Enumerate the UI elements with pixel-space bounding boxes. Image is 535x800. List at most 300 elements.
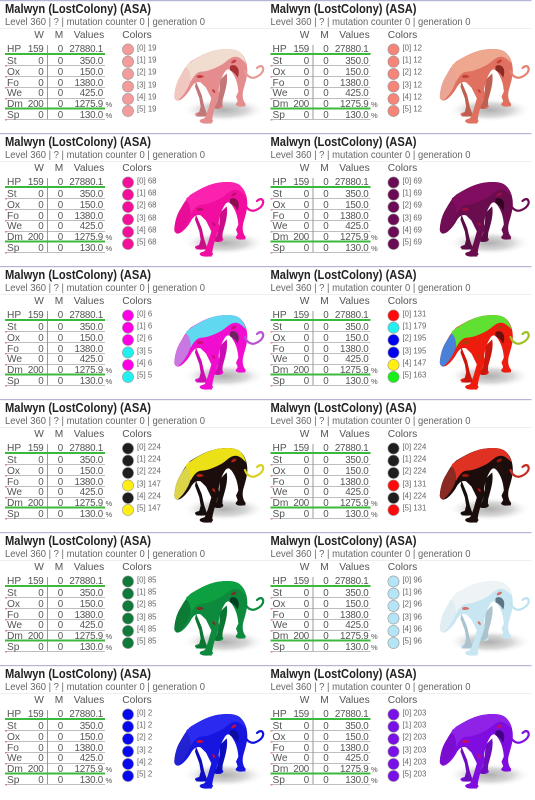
dog tail xyxy=(245,598,263,610)
stats table: 130.0 xyxy=(80,642,104,653)
panel: malwyn colour 85 xyxy=(0,532,266,656)
stats table: 200 xyxy=(28,764,44,775)
stats table: We xyxy=(7,354,22,365)
stats table: 150.0 xyxy=(345,67,369,78)
stats table: Sp xyxy=(7,243,20,254)
level line: Level 360 | ? | mutation counter 0 | generation 0 xyxy=(270,549,471,560)
stats table: 350.0 xyxy=(80,455,104,466)
stats table: 0 xyxy=(38,211,44,222)
colors list: Colors xyxy=(122,429,152,440)
stats table: 350.0 xyxy=(80,56,104,67)
stats table xyxy=(272,30,378,121)
colors list xyxy=(122,30,157,117)
panel: malwyn black and yellow xyxy=(0,399,266,523)
stats table: 0 xyxy=(38,642,44,653)
stats table xyxy=(272,562,378,653)
stats table: 27880.1 xyxy=(69,44,103,55)
stats table: 0 xyxy=(304,211,310,222)
stats table: % xyxy=(371,100,378,109)
colors list: [3] 12 xyxy=(402,80,422,90)
stats table: HP xyxy=(272,177,287,188)
stats table: We xyxy=(7,620,22,631)
stats table: W xyxy=(300,562,310,573)
stats table: 1275.9 xyxy=(75,365,103,376)
colors list: Colors xyxy=(388,30,417,41)
stats table: 350.0 xyxy=(345,189,369,200)
stats table: 0 xyxy=(304,743,310,754)
stats table: Values xyxy=(74,296,104,307)
stats table: Dm xyxy=(7,99,23,110)
level line: Level 360 | ? | mutation counter 0 | generation 0 xyxy=(5,416,205,427)
title: Malwyn (LostColony) (ASA) xyxy=(5,401,151,415)
stats table: 0 xyxy=(323,243,329,254)
colors list: [4] 224 xyxy=(137,492,162,500)
stats table: HP xyxy=(7,443,21,454)
stats table: Values xyxy=(339,163,370,174)
stats table: 0 xyxy=(323,232,329,243)
stats table: 27880.1 xyxy=(69,177,103,188)
stats table: 0 xyxy=(323,365,329,376)
stats table: 0 xyxy=(58,709,64,720)
stats table: 350.0 xyxy=(80,721,104,732)
stats table: 200 xyxy=(28,631,44,642)
stats table: 0 xyxy=(304,221,310,232)
stats table: 0 xyxy=(58,620,64,631)
stats table: St xyxy=(272,56,282,67)
stats table: 0 xyxy=(58,322,64,333)
stats table: M xyxy=(320,562,329,573)
stats table: 150.0 xyxy=(345,333,369,344)
stats table: 425.0 xyxy=(80,88,104,99)
stats table: Ox xyxy=(272,333,286,344)
title: Malwyn (LostColony) (ASA) xyxy=(270,135,416,149)
stats table: 425.0 xyxy=(345,620,369,631)
colors list xyxy=(122,562,157,649)
stats table: St xyxy=(7,56,17,67)
stats table: 0 xyxy=(304,455,310,466)
stats table: 0 xyxy=(58,200,64,211)
colors list: [3] 19 xyxy=(137,80,157,90)
colors list: [5] 96 xyxy=(402,636,422,646)
stats table: 0 xyxy=(38,200,44,211)
colors list: [0] 131 xyxy=(402,310,426,318)
stats table: 0 xyxy=(304,477,310,488)
colors list: Colors xyxy=(388,562,417,573)
stats table: 130.0 xyxy=(345,110,369,121)
stats table: Dm xyxy=(7,365,23,376)
stats table: Values xyxy=(339,695,370,706)
stats table: Dm xyxy=(272,764,288,775)
stats table: 1380.0 xyxy=(340,211,369,222)
stats table: 0 xyxy=(323,477,329,488)
stats table: 159 xyxy=(28,443,44,454)
stats table: 0 xyxy=(323,189,329,200)
stats table: 0 xyxy=(304,200,310,211)
stats table: Fo xyxy=(272,610,285,621)
stats table: 1380.0 xyxy=(340,610,369,621)
stats table: 1380.0 xyxy=(75,211,104,222)
stats table: We xyxy=(7,487,22,498)
stats table: 150.0 xyxy=(345,732,369,743)
stats table: 350.0 xyxy=(345,322,369,333)
stats table: 0 xyxy=(304,88,310,99)
stats table: 0 xyxy=(58,354,64,365)
stats table: Fo xyxy=(7,743,19,754)
stats table: 0 xyxy=(58,67,64,78)
stats table: 0 xyxy=(304,620,310,631)
stats table: 0 xyxy=(304,599,310,610)
stats table: 0 xyxy=(58,487,64,498)
stats table: We xyxy=(272,753,288,764)
stats table: 200 xyxy=(28,365,44,376)
stats table: 1380.0 xyxy=(75,610,104,621)
stats table: 159 xyxy=(293,44,309,55)
stats table: 200 xyxy=(28,232,44,243)
stats table: 0 xyxy=(304,487,310,498)
stats table: 0 xyxy=(38,221,44,232)
stats table: 0 xyxy=(38,487,44,498)
stats table: 0 xyxy=(38,610,44,621)
stats table: 0 xyxy=(38,78,44,89)
stats table: St xyxy=(7,189,17,200)
stats table: Sp xyxy=(272,509,285,520)
stats table: We xyxy=(272,487,288,498)
colors list: [0] 2 xyxy=(137,708,152,718)
stats table: Sp xyxy=(272,243,285,254)
dog tail xyxy=(245,66,263,78)
stats table: 0 xyxy=(323,99,329,110)
stats table: St xyxy=(7,588,17,599)
stats table: HP xyxy=(7,709,21,720)
stats table: 350.0 xyxy=(345,588,369,599)
stats table: Sp xyxy=(272,775,285,786)
colors list: [3] 85 xyxy=(137,612,157,622)
stats table: We xyxy=(272,354,288,365)
stats table: Dm xyxy=(272,365,288,376)
stats table: 0 xyxy=(323,333,329,344)
stats table: 0 xyxy=(323,322,329,333)
colors list: [5] 203 xyxy=(402,770,426,778)
colors list: Colors xyxy=(122,695,152,706)
stats table: M xyxy=(55,163,63,174)
stats table: Ox xyxy=(7,466,20,477)
stats table: 0 xyxy=(304,189,310,200)
panel: malwyn mixed colours xyxy=(266,266,532,390)
colors list: [1] 85 xyxy=(137,588,157,596)
stats table: % xyxy=(106,111,112,120)
colors list: Colors xyxy=(122,30,152,41)
dog tail xyxy=(245,199,263,211)
stats table: W xyxy=(34,163,44,174)
stats table: 425.0 xyxy=(80,354,104,365)
stats table: 0 xyxy=(323,610,329,621)
title: Malwyn (LostColony) (ASA) xyxy=(270,667,416,681)
stats table: 27880.1 xyxy=(69,576,103,587)
title: Malwyn (LostColony) (ASA) xyxy=(270,534,416,548)
colors list: [5] 147 xyxy=(137,504,161,512)
dog render xyxy=(174,448,266,523)
level line: Level 360 | ? | mutation counter 0 | generation 0 xyxy=(5,17,205,28)
stats table: 0 xyxy=(304,344,310,355)
level line: Level 360 | ? | mutation counter 0 | generation 0 xyxy=(270,17,471,28)
stats table: 1275.9 xyxy=(340,365,368,376)
stats table: Dm xyxy=(272,631,288,642)
stats table: 200 xyxy=(28,99,44,110)
stats table: 27880.1 xyxy=(335,310,368,321)
stats table: 1275.9 xyxy=(340,631,368,642)
stats table: Sp xyxy=(272,642,285,653)
stats table: 0 xyxy=(323,78,329,89)
stats table: % xyxy=(371,366,378,375)
stats table: 0 xyxy=(323,498,329,509)
dog tail xyxy=(245,332,263,344)
stats table: Dm xyxy=(7,631,23,642)
stats table: We xyxy=(272,221,288,232)
colors list: Colors xyxy=(122,296,152,307)
stats table: Dm xyxy=(272,498,288,509)
stats table: 0 xyxy=(58,310,64,321)
stats table: 425.0 xyxy=(345,487,369,498)
stats table: 159 xyxy=(28,310,44,321)
title: Malwyn (LostColony) (ASA) xyxy=(5,534,151,548)
stats table: Sp xyxy=(7,642,20,653)
stats table: 27880.1 xyxy=(69,443,103,454)
stats table: 1380.0 xyxy=(340,344,369,355)
stats table: W xyxy=(34,562,44,573)
colors list: [0] 224 xyxy=(402,442,427,452)
stats table: % xyxy=(106,366,112,375)
stats table: 0 xyxy=(58,610,64,621)
colors list xyxy=(388,163,422,250)
stats table: M xyxy=(320,163,329,174)
colors list: [4] 96 xyxy=(402,624,422,634)
stats table: % xyxy=(106,233,112,242)
colors list: [0] 96 xyxy=(402,576,422,584)
stats table: Fo xyxy=(272,743,285,754)
stats table: Values xyxy=(339,429,370,440)
stats table xyxy=(7,296,112,387)
stats table: 150.0 xyxy=(80,67,104,78)
stats table: Sp xyxy=(272,376,285,387)
stats table: 159 xyxy=(28,576,44,587)
stats table: 150.0 xyxy=(80,599,104,610)
stats table: HP xyxy=(7,44,21,55)
stats table: 350.0 xyxy=(345,56,369,67)
dog render xyxy=(174,581,266,656)
colors list: [5] 68 xyxy=(137,238,157,246)
dog render xyxy=(174,182,266,257)
stats table: % xyxy=(106,377,112,386)
colors list: [1] 179 xyxy=(402,322,426,330)
stats table: Ox xyxy=(7,200,20,211)
stats table: St xyxy=(7,322,17,333)
stats table: M xyxy=(55,562,63,573)
colors list: [3] 96 xyxy=(402,612,422,622)
stats table: 0 xyxy=(323,631,329,642)
colors list xyxy=(122,695,152,782)
stats table: 0 xyxy=(58,732,64,743)
stats table: 0 xyxy=(58,588,64,599)
colors list: [3] 2 xyxy=(137,746,152,754)
colors list: [0] 224 xyxy=(137,442,162,452)
stats table: 0 xyxy=(58,576,64,587)
stats table: 0 xyxy=(58,764,64,775)
stats table: 159 xyxy=(28,44,44,55)
stats table: 0 xyxy=(304,67,310,78)
stats table: M xyxy=(55,30,63,41)
stats table: % xyxy=(371,377,378,386)
stats table: % xyxy=(106,643,112,652)
stats table: % xyxy=(106,244,112,253)
stats table: Sp xyxy=(7,509,20,520)
stats table: 200 xyxy=(293,232,310,243)
stats table: 0 xyxy=(38,354,44,365)
stats table: 0 xyxy=(304,721,310,732)
stats table: Sp xyxy=(7,376,20,387)
colors list: Colors xyxy=(388,429,417,440)
dog tail xyxy=(510,731,529,743)
stats table xyxy=(272,429,378,520)
colors list: [1] 224 xyxy=(137,454,162,464)
stats table: 159 xyxy=(28,709,44,720)
stats table: Ox xyxy=(272,732,286,743)
colors list: [5] 69 xyxy=(402,238,422,246)
colors list: [3] 195 xyxy=(402,346,427,356)
stats table: 0 xyxy=(58,376,64,387)
colors list: Colors xyxy=(388,163,417,174)
stats table: 159 xyxy=(293,310,309,321)
stats table: 0 xyxy=(323,443,329,454)
colors list: [0] 85 xyxy=(137,576,157,584)
stats table: 0 xyxy=(323,599,329,610)
stats table: Values xyxy=(74,429,104,440)
stats table: 130.0 xyxy=(80,775,104,786)
stats table: 159 xyxy=(293,709,309,720)
stats table: 1275.9 xyxy=(340,232,368,243)
stats table: 425.0 xyxy=(80,221,104,232)
stats table: HP xyxy=(7,576,21,587)
stats table: 0 xyxy=(38,376,44,387)
stats table: % xyxy=(106,776,112,785)
stats table: 0 xyxy=(58,443,64,454)
colors list: [3] 69 xyxy=(402,214,422,222)
stats table: 0 xyxy=(58,232,64,243)
stats table: W xyxy=(300,30,310,41)
stats table: % xyxy=(371,244,378,253)
stats table: 200 xyxy=(28,498,44,509)
colors list: [0] 12 xyxy=(402,44,422,52)
stats table: Ox xyxy=(7,732,20,743)
stats table: 0 xyxy=(58,775,64,786)
stats table: 0 xyxy=(323,221,329,232)
stats table: HP xyxy=(272,576,287,587)
stats table: 0 xyxy=(58,498,64,509)
stats table: 0 xyxy=(58,509,64,520)
stats table: 1380.0 xyxy=(75,344,104,355)
colors list: [2] 96 xyxy=(402,600,422,608)
colors list: [4] 12 xyxy=(402,92,422,102)
stats table: Ox xyxy=(272,466,286,477)
stats table: 0 xyxy=(58,44,64,55)
panel: malwyn colour 68 xyxy=(0,133,266,257)
stats table: Ox xyxy=(272,599,286,610)
stats table: 27880.1 xyxy=(69,310,103,321)
stats table: Fo xyxy=(7,78,19,89)
level line: Level 360 | ? | mutation counter 0 | generation 0 xyxy=(5,682,205,693)
stats table: 425.0 xyxy=(345,221,369,232)
stats table: % xyxy=(371,765,378,774)
colors list: [5] 5 xyxy=(137,370,153,380)
stats table: W xyxy=(300,296,310,307)
stats table: We xyxy=(272,88,288,99)
stats table: 0 xyxy=(38,243,44,254)
stats table: 1275.9 xyxy=(340,764,368,775)
colors list: [2] 68 xyxy=(137,200,157,210)
stats table: 0 xyxy=(38,721,44,732)
stats table: We xyxy=(7,221,22,232)
stats table: 0 xyxy=(38,455,44,466)
stats table: 350.0 xyxy=(80,322,104,333)
title: Malwyn (LostColony) (ASA) xyxy=(270,2,416,16)
stats table: 0 xyxy=(58,631,64,642)
stats table: 130.0 xyxy=(345,376,369,387)
colors list: [4] 224 xyxy=(402,492,427,500)
stats table: 0 xyxy=(323,177,329,188)
stats table: 0 xyxy=(304,610,310,621)
colors list: [4] 147 xyxy=(402,358,426,368)
stats table: Values xyxy=(339,30,370,41)
stats table: M xyxy=(320,429,329,440)
title: Malwyn (LostColony) (ASA) xyxy=(5,135,151,149)
panel: malwyn colours 6 and 5 xyxy=(0,266,266,390)
colors list: [1] 96 xyxy=(402,588,422,596)
stats table: 1275.9 xyxy=(75,232,103,243)
colors list: [2] 224 xyxy=(402,466,427,476)
colors list xyxy=(388,695,426,782)
dog render xyxy=(174,49,266,124)
panel: malwyn colour 96 xyxy=(266,532,532,656)
stats table: 0 xyxy=(304,376,310,387)
stats table: 0 xyxy=(323,344,329,355)
stats table: M xyxy=(320,695,329,706)
colors list: [4] 6 xyxy=(137,358,152,368)
stats table: % xyxy=(371,233,378,242)
stats table: 130.0 xyxy=(345,243,369,254)
stats table: 0 xyxy=(58,333,64,344)
stats table: Fo xyxy=(7,344,19,355)
stats table: 0 xyxy=(38,322,44,333)
colors list: [2] 85 xyxy=(137,600,157,608)
stats table: 0 xyxy=(304,509,310,520)
stats table: 0 xyxy=(58,177,64,188)
stats table: Fo xyxy=(272,344,285,355)
stats table: M xyxy=(55,429,63,440)
stats table: 0 xyxy=(58,466,64,477)
stats table: 200 xyxy=(293,631,310,642)
colors list: Colors xyxy=(122,163,152,174)
colors list: [2] 6 xyxy=(137,334,152,342)
stats table: 0 xyxy=(58,99,64,110)
colors list xyxy=(388,562,422,649)
stats table: St xyxy=(272,322,282,333)
colors list: [0] 6 xyxy=(137,310,152,318)
stats table: Dm xyxy=(272,99,288,110)
stats table: 0 xyxy=(323,620,329,631)
stats table: 0 xyxy=(323,764,329,775)
stats table: 27880.1 xyxy=(335,709,368,720)
stats table: 1380.0 xyxy=(75,743,104,754)
stats table: 1275.9 xyxy=(75,631,103,642)
